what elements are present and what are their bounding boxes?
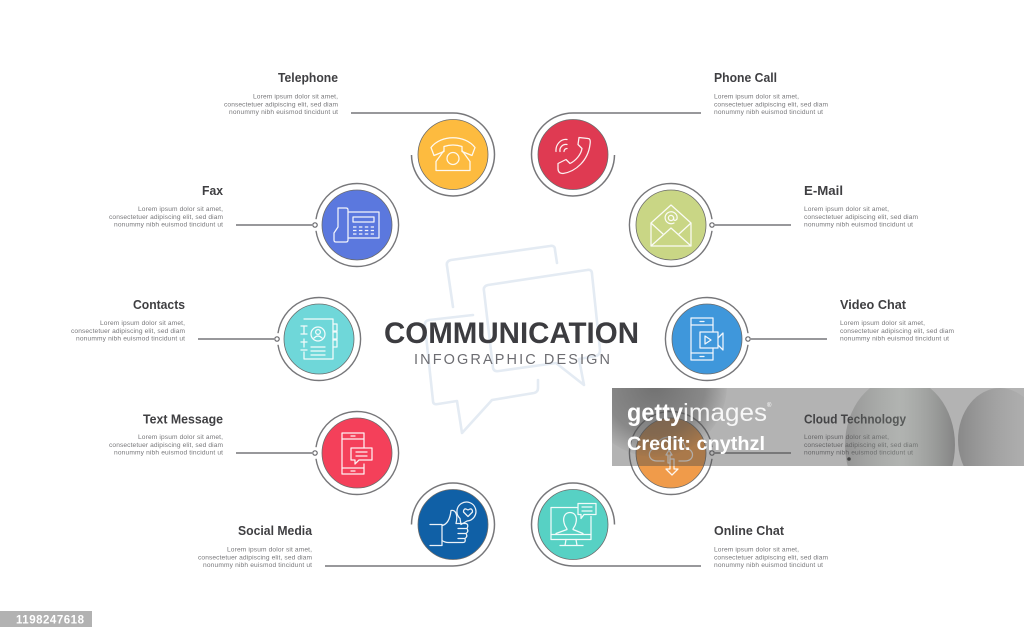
description: nonummy nibh euismod tincidunt ut	[229, 109, 338, 116]
icon: cloud transfer	[649, 437, 692, 475]
panel: Text Message	[109, 412, 399, 494]
badge	[636, 190, 706, 260]
panel: Telephone	[224, 71, 494, 196]
description	[109, 206, 224, 228]
panel: Cloud Technology	[629, 412, 918, 494]
badge	[418, 120, 488, 190]
description	[198, 546, 312, 569]
description: nonummy nibh euismod tincidunt ut	[714, 109, 823, 116]
description	[840, 320, 954, 342]
description	[714, 94, 828, 116]
icon: fax	[334, 208, 379, 242]
description: nonummy nibh euismod tincidunt ut	[840, 336, 949, 342]
badge	[538, 120, 608, 190]
description: consectetuer adipiscing elit, sed diam	[840, 328, 954, 335]
icon: envelope	[651, 205, 691, 246]
junction dot	[313, 223, 317, 227]
junction dot	[710, 451, 714, 455]
junction dot	[710, 223, 714, 227]
description: Lorem ipsum dolor sit amet,	[227, 546, 312, 554]
description: nonummy nibh euismod tincidunt ut	[114, 450, 223, 456]
description: nonummy nibh euismod tincidunt ut	[76, 336, 185, 342]
image id tag	[0, 611, 92, 627]
description	[714, 546, 828, 569]
description: Lorem ipsum dolor sit amet,	[714, 94, 799, 100]
watermark wordmark: getty	[627, 399, 683, 427]
description	[804, 206, 918, 228]
badge	[672, 304, 742, 374]
description: nonummy nibh euismod tincidunt ut	[114, 222, 223, 228]
description: consectetuer adipiscing elit, sed diam	[804, 442, 918, 449]
description: Lorem ipsum dolor sit amet,	[138, 434, 223, 441]
description	[109, 434, 224, 456]
ring	[629, 184, 712, 266]
description: Lorem ipsum dolor sit amet,	[804, 206, 889, 213]
watermark wordmark: images	[683, 399, 767, 427]
icon: telephone	[431, 138, 475, 170]
description: nonummy nibh euismod tincidunt ut	[203, 562, 312, 569]
description: Lorem ipsum dolor sit amet,	[253, 94, 338, 100]
ring	[316, 412, 399, 494]
icon: video phone	[691, 318, 723, 360]
description: consectetuer adipiscing elit, sed diam	[804, 214, 918, 221]
description: consectetuer adipiscing elit, sed diam	[714, 102, 828, 108]
heading: Contacts	[133, 298, 185, 312]
connector	[751, 338, 827, 340]
description	[804, 434, 918, 456]
heading: E-Mail	[804, 184, 843, 198]
connector and ring	[532, 113, 701, 196]
panel: Video Chat	[665, 297, 954, 380]
heading: Fax	[202, 184, 223, 198]
connector	[715, 224, 791, 226]
connector	[715, 452, 791, 454]
background speech bubbles	[425, 246, 600, 433]
badge	[322, 418, 392, 488]
ring	[316, 183, 399, 266]
description: consectetuer adipiscing elit, sed diam	[714, 554, 828, 562]
panel: Contacts	[71, 298, 361, 380]
connector and ring	[351, 113, 494, 196]
description: nonummy nibh euismod tincidunt ut	[804, 222, 913, 228]
panel: Fax	[109, 183, 399, 266]
icon: monitor chat	[551, 504, 596, 546]
connector	[236, 452, 312, 454]
description: nonummy nibh euismod tincidunt ut	[804, 450, 913, 456]
panel: Phone Call	[532, 71, 828, 196]
ring	[278, 298, 361, 380]
icon: address book	[301, 319, 337, 359]
description: Lorem ipsum dolor sit amet,	[840, 320, 925, 327]
heading: Text Message	[143, 412, 223, 426]
watermark wordmark	[627, 399, 772, 427]
description: Lorem ipsum dolor sit amet,	[714, 546, 799, 554]
heading: Telephone	[278, 71, 338, 85]
image id tag: 1198247618	[16, 614, 85, 626]
ring	[629, 412, 712, 494]
description	[224, 94, 338, 116]
description	[71, 320, 186, 342]
watermark credit: Credit: cnythzl	[627, 434, 765, 455]
description: nonummy nibh euismod tincidunt ut	[714, 562, 823, 569]
connector and ring	[325, 483, 494, 566]
junction dot	[313, 451, 317, 455]
description: consectetuer adipiscing elit, sed diam	[71, 328, 186, 335]
connector and ring	[531, 483, 701, 566]
heading: Video Chat	[840, 298, 907, 312]
heading: Social Media	[238, 524, 313, 538]
connector	[198, 338, 274, 340]
panel: Social Media	[198, 483, 494, 569]
icon: thumbs up with heart	[430, 502, 476, 546]
badge	[322, 190, 392, 260]
badge	[636, 418, 706, 488]
description: consectetuer adipiscing elit, sed diam	[198, 554, 312, 562]
ring	[665, 297, 748, 380]
title: COMMUNICATION	[384, 317, 639, 350]
junction dot	[275, 337, 279, 341]
description: consectetuer adipiscing elit, sed diam	[109, 442, 224, 449]
description: Lorem ipsum dolor sit amet,	[100, 320, 185, 327]
heading: Phone Call	[714, 71, 777, 85]
watermark wordmark: ®	[767, 402, 772, 409]
icon: phone message	[342, 433, 372, 474]
heading: Cloud Technology	[804, 412, 906, 426]
description: consectetuer adipiscing elit, sed diam	[224, 102, 338, 108]
badge	[284, 304, 354, 374]
watermark banner	[583, 313, 1024, 513]
badge	[538, 490, 608, 560]
panel: E-Mail	[629, 184, 918, 266]
description: Lorem ipsum dolor sit amet,	[138, 206, 223, 213]
connector	[236, 224, 312, 226]
description: Lorem ipsum dolor sit amet,	[804, 434, 889, 441]
icon: phone call	[556, 138, 590, 174]
panel: Online Chat	[531, 483, 828, 569]
badge	[418, 490, 488, 560]
junction dot	[746, 337, 750, 341]
subtitle: INFOGRAPHIC DESIGN	[414, 352, 610, 368]
heading: Online Chat	[714, 524, 785, 538]
description: consectetuer adipiscing elit, sed diam	[109, 214, 224, 221]
